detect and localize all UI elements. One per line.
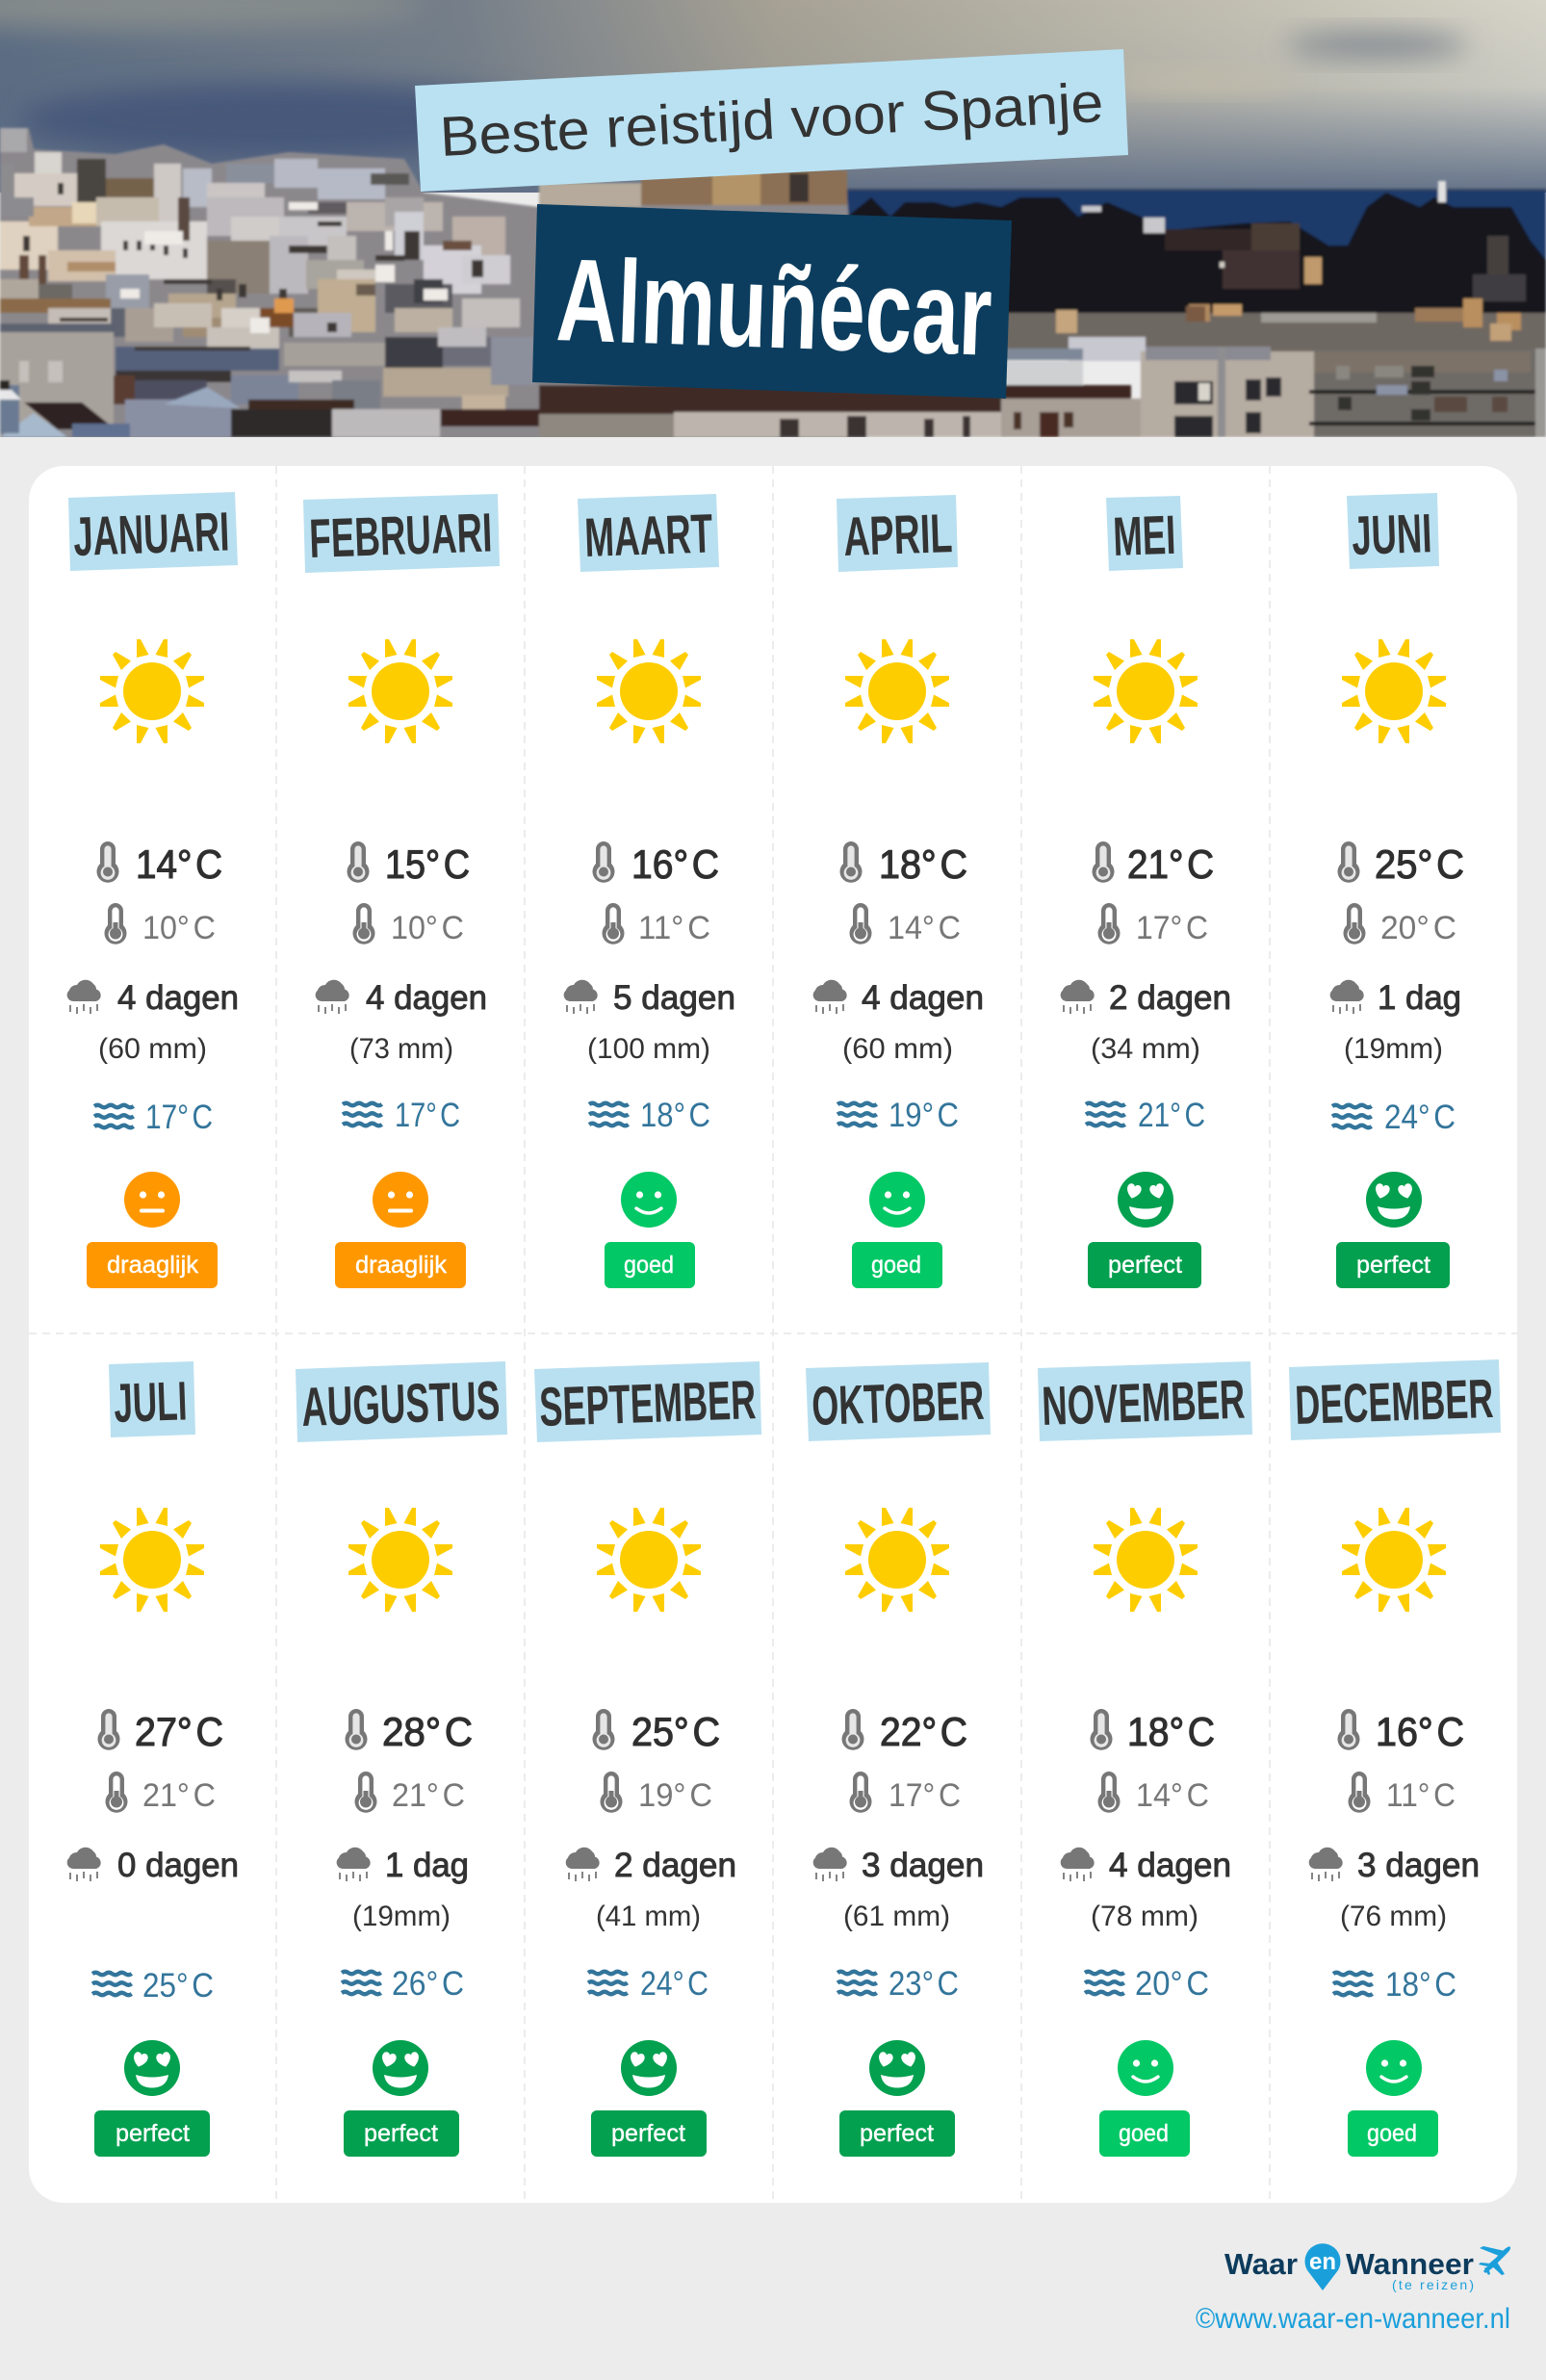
icon: sun: [845, 639, 949, 743]
month: maart: [564, 494, 735, 1288]
rain days: 5 dagen: [613, 979, 735, 1017]
icon: thermometer high: [98, 1709, 119, 1750]
rain days: 0 dagen: [117, 1847, 239, 1884]
max temperature: 15°C: [385, 841, 470, 887]
rainfall: (34 mm): [1091, 1033, 1200, 1065]
icon: sun: [1342, 639, 1446, 743]
month label: JANUARI: [72, 501, 230, 568]
icon: thermometer high: [96, 841, 119, 883]
sea temperature: 24°C: [1384, 1099, 1456, 1136]
icon: waves: [343, 1103, 382, 1125]
rainfall: (60 mm): [842, 1033, 953, 1065]
icon: smiling face: [1366, 2040, 1422, 2096]
month: januari: [67, 492, 239, 1288]
sea temperature: 24°C: [640, 1965, 709, 2003]
icon: thermometer low: [1344, 903, 1365, 944]
icon: sun: [1094, 639, 1198, 743]
icon: thermometer high: [839, 841, 863, 883]
icon: rain cloud: [1061, 980, 1095, 1014]
rating badge: draaglijk: [355, 1252, 448, 1279]
logo: Waar en Wanneer: Waar: [1224, 2247, 1298, 2281]
left city blocks: [0, 128, 27, 152]
min temperature: 10°C: [391, 910, 464, 946]
icon: waves: [837, 1972, 877, 1994]
max temperature: 21°C: [1127, 841, 1214, 887]
title banner: [532, 204, 1012, 399]
icon: smiling face: [1118, 2040, 1173, 2096]
rain days: 4 dagen: [117, 979, 239, 1017]
max temperature: 18°C: [1127, 1709, 1215, 1754]
month: oktober: [806, 1362, 991, 2157]
sea temperature: 17°C: [145, 1099, 213, 1136]
month label: [534, 1361, 761, 1442]
min temperature: 17°C: [889, 1777, 961, 1814]
icon: sun: [597, 639, 701, 743]
icon: heart-eyes face: [373, 2040, 428, 2096]
month label: [296, 1361, 507, 1442]
icon: thermometer low: [849, 903, 872, 944]
rating badge: perfect: [116, 2120, 190, 2147]
month: juli: [67, 1361, 239, 2157]
icon: thermometer low: [104, 903, 127, 944]
icon: rain cloud: [566, 1848, 600, 1881]
icon: sun: [1342, 1508, 1446, 1612]
rating badge: perfect: [1108, 1252, 1182, 1279]
icon: thermometer high: [1338, 841, 1359, 883]
max temperature: 14°C: [136, 841, 222, 887]
rating badge: [94, 2110, 210, 2157]
sea temperature: 17°C: [395, 1097, 460, 1134]
icon: rain cloud: [67, 980, 101, 1014]
month: november: [1038, 1361, 1252, 2157]
icon: waves: [589, 1103, 629, 1125]
rainfall: (73 mm): [349, 1033, 453, 1065]
rating badge: [605, 1242, 695, 1288]
icon: neutral face: [124, 1172, 180, 1228]
icon: thermometer high: [593, 841, 614, 883]
icon: map pin: en: [1309, 2249, 1336, 2275]
fine city detail: [23, 183, 483, 350]
month label: APRIL: [842, 503, 953, 568]
month label: SEPTEMBER: [538, 1369, 757, 1438]
min temperature: 21°C: [142, 1777, 216, 1814]
sea temperature: 18°C: [640, 1097, 710, 1134]
rating badge: [1348, 2110, 1438, 2157]
rainfall: (19mm): [352, 1901, 451, 1932]
icon: thermometer high: [347, 841, 370, 883]
max temperature: 18°C: [879, 841, 967, 887]
icon: heart-eyes face: [124, 2040, 180, 2096]
right side: [847, 193, 1546, 323]
min temperature: 17°C: [1136, 910, 1208, 946]
icon: waves: [94, 1105, 134, 1127]
logo: Waar en Wanneer: (te reizen): [1392, 2277, 1474, 2292]
logo: Waar en Wanneer: [1224, 2243, 1510, 2292]
max temperature: 25°C: [1375, 841, 1464, 887]
icon: thermometer high: [593, 1709, 614, 1750]
logo: Waar en Wanneer: Wanneer: [1346, 2247, 1474, 2281]
min temperature: 14°C: [1136, 1777, 1209, 1814]
panel: climate table: [29, 466, 1517, 2203]
min temperature: 10°C: [142, 910, 216, 946]
icon: heart-eyes face: [869, 2040, 925, 2096]
rating badge: [591, 2110, 707, 2157]
min temperature: 20°C: [1380, 910, 1456, 946]
max temperature: 25°C: [631, 1709, 720, 1754]
rating badge: perfect: [860, 2120, 934, 2147]
icon: rain cloud: [1309, 1848, 1343, 1881]
rating badge: draaglijk: [107, 1252, 199, 1279]
sea temperature: 18°C: [1385, 1966, 1456, 2004]
rating badge: [344, 2110, 459, 2157]
month label: [578, 494, 719, 572]
rainfall: (61 mm): [843, 1901, 950, 1932]
rainfall: (100 mm): [587, 1033, 710, 1065]
rain days: 4 dagen: [1109, 1847, 1231, 1884]
subtitle banner: Beste reistijd voor Spanje: [438, 71, 1105, 168]
sea temperature: 21°C: [1138, 1097, 1205, 1134]
sea temperature: 26°C: [392, 1965, 464, 2003]
month label: [837, 495, 958, 572]
icon: thermometer high: [345, 1709, 368, 1750]
icon: heart-eyes face: [621, 2040, 677, 2096]
icon: sun: [597, 1508, 701, 1612]
min temperature: 11°C: [638, 910, 710, 946]
icon: rain cloud: [67, 1848, 101, 1881]
rating badge: goed: [871, 1252, 921, 1279]
icon: rain cloud: [316, 980, 349, 1014]
min temperature: 21°C: [392, 1777, 465, 1814]
month: september: [534, 1361, 761, 2157]
icon: sun: [348, 1508, 452, 1612]
rainfall: (60 mm): [98, 1033, 207, 1065]
rating badge: perfect: [364, 2120, 438, 2147]
icon: rain cloud: [1061, 1848, 1095, 1881]
icon: rain cloud: [1330, 980, 1364, 1014]
icon: smiling face: [869, 1172, 925, 1228]
icon: sun: [348, 639, 452, 743]
icon: sun: [100, 639, 204, 743]
sea temperature: 20°C: [1135, 1965, 1209, 2003]
rainfall: (19mm): [1344, 1033, 1443, 1065]
month label: MEI: [1112, 504, 1176, 568]
month label: FEBRUARI: [308, 502, 493, 570]
month label: [1347, 493, 1439, 569]
icon: thermometer low: [106, 1772, 127, 1813]
icon: heart-eyes face: [1366, 1172, 1422, 1228]
icon: thermometer high: [1092, 841, 1115, 883]
icon: smiling face: [621, 1172, 677, 1228]
icon: rain cloud: [564, 980, 598, 1014]
icon: waves: [1086, 1103, 1125, 1125]
icon: thermometer low: [1348, 1772, 1371, 1813]
month: juni: [1330, 493, 1464, 1288]
rain days: 2 dagen: [1109, 979, 1231, 1017]
icon: waves: [92, 1973, 132, 1995]
icon: rain cloud: [813, 1848, 847, 1881]
month: augustus: [296, 1361, 507, 2157]
subtitle banner: [415, 49, 1128, 192]
rating badge: perfect: [611, 2120, 685, 2147]
rating badge: goed: [624, 1252, 674, 1279]
rating badge: [1088, 1242, 1201, 1288]
icon: thermometer low: [603, 903, 624, 944]
month label: MAART: [583, 503, 713, 569]
max temperature: 28°C: [382, 1709, 473, 1754]
icon: thermometer low: [352, 903, 375, 944]
rating badge: [87, 1242, 218, 1288]
month label: OKTOBER: [811, 1370, 985, 1437]
min temperature: 19°C: [638, 1777, 712, 1814]
icon: thermometer low: [1097, 1772, 1121, 1813]
icon: thermometer low: [849, 1772, 872, 1813]
icon: heart-eyes face: [1118, 1172, 1173, 1228]
month label: [109, 1361, 195, 1437]
rain days: 3 dagen: [1357, 1847, 1480, 1884]
icon: rain cloud: [337, 1848, 371, 1881]
month label: [1106, 496, 1183, 571]
month label: [806, 1362, 991, 1441]
icon: sun: [1094, 1508, 1198, 1612]
icon: neutral face: [373, 1172, 428, 1228]
rainfall: (78 mm): [1091, 1901, 1198, 1932]
rating badge: [335, 1242, 466, 1288]
icon: thermometer high: [841, 1709, 864, 1750]
icon: rain cloud: [813, 980, 847, 1014]
icon: map pin: [1305, 2243, 1341, 2290]
month label: [1038, 1361, 1252, 1441]
rain days: 1 dag: [385, 1847, 469, 1884]
icon: thermometer low: [1097, 903, 1121, 944]
month label: JULI: [113, 1370, 188, 1435]
icon: sun: [100, 1508, 204, 1612]
rainfall: (76 mm): [1340, 1901, 1447, 1932]
icon: waves: [837, 1103, 877, 1125]
month: mei: [1061, 496, 1231, 1288]
icon: airplane: [1479, 2246, 1510, 2275]
icon: thermometer low: [601, 1772, 622, 1813]
rating badge: perfect: [1356, 1252, 1430, 1279]
month label: [68, 492, 238, 571]
rating badge: [1099, 2110, 1190, 2157]
icon: sun: [845, 1508, 949, 1612]
month: april: [813, 495, 984, 1288]
month: februari: [303, 494, 500, 1288]
rain days: 3 dagen: [862, 1847, 984, 1884]
rating badge: goed: [1367, 2120, 1417, 2147]
icon: thermometer low: [354, 1772, 377, 1813]
rain days: 2 dagen: [614, 1847, 736, 1884]
title banner: Almuñécar: [554, 234, 994, 380]
sea temperature: 25°C: [142, 1967, 214, 2005]
month label: JUNI: [1351, 503, 1432, 567]
icon: thermometer high: [1090, 1709, 1113, 1750]
month: december: [1289, 1359, 1501, 2157]
max temperature: 27°C: [135, 1709, 223, 1754]
rating badge: [839, 2110, 955, 2157]
max temperature: 16°C: [631, 841, 719, 887]
rating badge: [852, 1242, 942, 1288]
rainfall: (41 mm): [596, 1901, 701, 1932]
month label: AUGUSTUS: [300, 1370, 501, 1438]
rain days: 1 dag: [1378, 979, 1461, 1017]
month label: NOVEMBER: [1041, 1369, 1246, 1437]
website credit: ©www.waar-en-wanneer.nl: [1196, 2303, 1510, 2335]
rating badge: [1336, 1242, 1450, 1288]
icon: thermometer high: [1338, 1709, 1359, 1750]
header photo: [0, 0, 1546, 443]
max temperature: 16°C: [1376, 1709, 1464, 1754]
rain days: 4 dagen: [366, 979, 487, 1017]
icon: waves: [1085, 1972, 1124, 1994]
icon: waves: [1333, 1973, 1373, 1995]
month label: [303, 494, 500, 573]
sea temperature: 23°C: [889, 1965, 959, 2003]
min temperature: 14°C: [888, 910, 961, 946]
icon: waves: [1332, 1105, 1372, 1127]
icon: waves: [588, 1972, 628, 1994]
rating badge: goed: [1119, 2120, 1169, 2147]
centre and castle: [641, 170, 847, 205]
icon: waves: [342, 1972, 381, 1994]
min temperature: 11°C: [1386, 1777, 1456, 1814]
sea temperature: 19°C: [889, 1097, 959, 1134]
max temperature: 22°C: [880, 1709, 967, 1754]
rain days: 4 dagen: [862, 979, 984, 1017]
